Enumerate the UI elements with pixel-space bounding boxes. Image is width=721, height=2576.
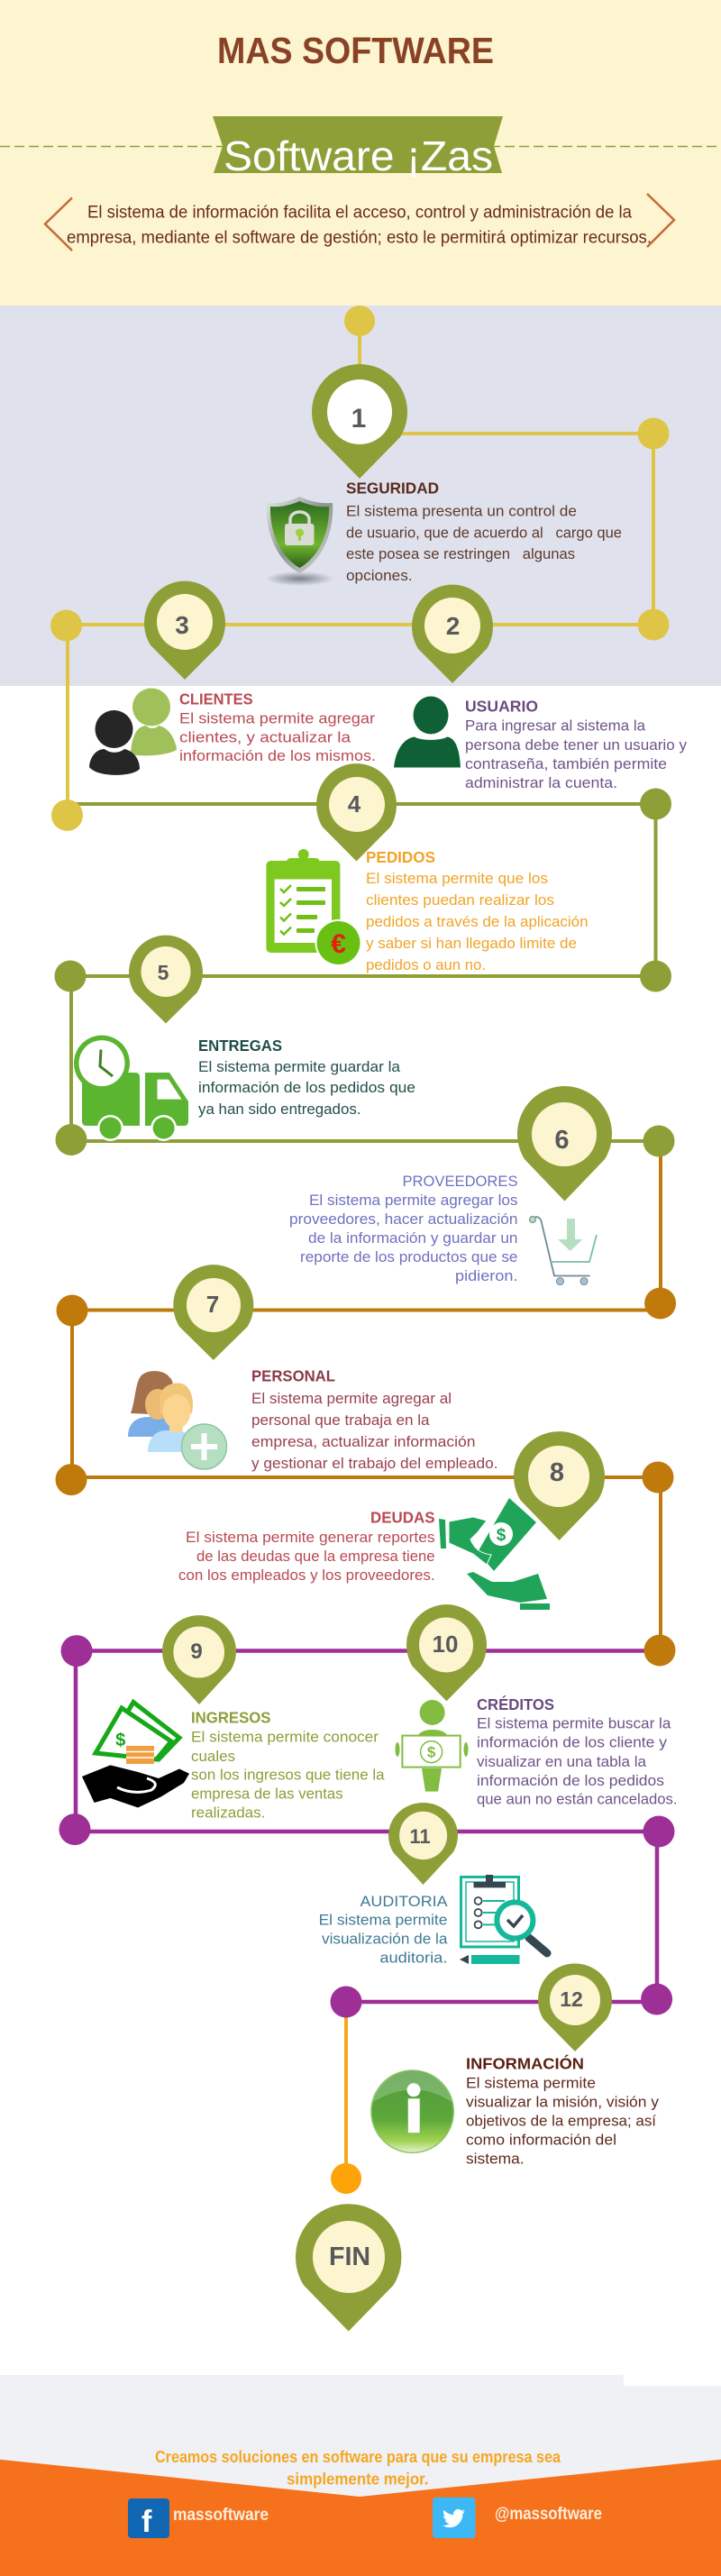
text: clientes: CLIENTES (179, 690, 253, 708)
pin 2 (412, 585, 493, 683)
connector: yellow (50, 306, 669, 831)
panel: step 9 ingresos (82, 1615, 385, 1822)
panel: footer (0, 2375, 721, 2576)
icon: money in hand: $ (115, 1731, 125, 1750)
panel: step 6 proveedores (289, 1086, 612, 1285)
pin 12 (538, 1964, 612, 2051)
pin 2: 2 (446, 612, 460, 640)
icon: people with plus (128, 1371, 227, 1469)
text: clientes (179, 690, 376, 764)
footer slogan: simplemente mejor. (287, 2470, 429, 2488)
pin: FIN: FIN (329, 2243, 370, 2271)
text: deudas: El sistema permite generar reportes (186, 1529, 435, 1546)
text: ingresos: son los ingresos que tiene la (191, 1767, 385, 1783)
pin 10: 10 (433, 1631, 458, 1658)
icon: money between hands: $ (497, 1526, 507, 1545)
title: MAS SOFTWARE (217, 30, 494, 71)
icon: shield with padlock (266, 497, 334, 586)
pin 1: 1 (351, 404, 366, 434)
text: informacion: como información del (466, 2132, 616, 2149)
text: proveedores: PROVEEDORES (402, 1173, 517, 1190)
text: ingresos: cuales (191, 1748, 235, 1765)
icon: person holding bill: $ (427, 1743, 436, 1761)
text: pedidos: y saber si han llegado limite de (366, 935, 577, 952)
text: usuario (465, 697, 687, 791)
pin 1 (312, 364, 407, 479)
pin 5 (129, 936, 203, 1024)
icon: info ball (371, 2070, 453, 2152)
pin 11 (388, 1803, 458, 1885)
pin: FIN (296, 2204, 401, 2331)
pin 4: 4 (348, 790, 361, 818)
icon: clipboard with euro: € (331, 929, 346, 959)
text: deudas: con los empleados y los proveedores. (178, 1567, 435, 1584)
text: usuario: Para ingresar al sistema la (465, 717, 646, 735)
footer gray background (0, 2375, 721, 2576)
text: entregas: información de los pedidos que (198, 1079, 415, 1096)
text: proveedores: reporte de los productos que se (300, 1248, 517, 1265)
text: pedidos: pedidos a través de la aplicación (366, 913, 589, 930)
panel: step 7 personal (128, 1265, 497, 1472)
text: ingresos: INGRESOS (191, 1709, 270, 1727)
connector: brown (56, 1141, 676, 1666)
pin 10 (406, 1604, 487, 1701)
intro text: El sistema de información facilita el acceso, control y administración de la (87, 204, 632, 222)
pin 6 (517, 1086, 612, 1201)
icon: facebook (128, 2498, 169, 2539)
text: entregas (198, 1037, 415, 1118)
text: clientes: clientes, y actualizar la (179, 728, 351, 745)
text: seguridad (346, 480, 622, 584)
text: proveedores: pidieron. (455, 1267, 517, 1284)
text: creditos (477, 1694, 678, 1807)
pin 12: 12 (560, 1987, 583, 2011)
text: proveedores: El sistema permite agregar los (309, 1192, 517, 1209)
text: seguridad: de usuario, que de acuerdo al cargo que (346, 524, 622, 541)
text: creditos: CRÉDITOS (477, 1694, 554, 1713)
footer slogan: Creamos soluciones en software para que su empresa sea (155, 2448, 561, 2466)
connector: purple (59, 1635, 674, 2017)
icon: facebook: f (141, 2505, 152, 2539)
text: seguridad: SEGURIDAD (346, 480, 439, 498)
text: entregas: ENTREGAS (198, 1037, 282, 1055)
twitter handle: @massoftware (495, 2505, 602, 2524)
footer orange band (0, 2460, 721, 2576)
panel: step 8 deudas (178, 1431, 605, 1610)
text: pedidos: clientes puedan realizar los (366, 891, 554, 909)
text: auditoria: El sistema permite (319, 1912, 447, 1929)
pin 8: 8 (550, 1458, 564, 1487)
icon: clipboard with euro (266, 849, 362, 966)
icon: left chevron (45, 198, 72, 251)
intro text: empresa, mediante el software de gestión; esto le permitirá optimizar recursos. (67, 229, 652, 247)
icon: shopping cart with arrow (530, 1217, 597, 1285)
text: pedidos: PEDIDOS (366, 848, 435, 866)
banner: Software ¡Zas: Software ¡Zas (224, 132, 493, 179)
text: clientes: información de los mismos. (179, 747, 376, 764)
text: personal: y gestionar el trabajo del empleado. (251, 1455, 497, 1472)
text: personal: personal que trabaja en la (251, 1411, 430, 1429)
panel: step 10 creditos (395, 1604, 678, 1807)
icon: money in hand (82, 1702, 189, 1808)
text: personal: El sistema permite agregar al (251, 1390, 452, 1407)
panel: step 4 pedidos (266, 763, 589, 973)
text: creditos: visualizar en una tabla la (477, 1753, 647, 1770)
icon: money between hands (439, 1498, 550, 1610)
icon: right chevron (647, 194, 674, 247)
text: pedidos: pedidos o aun no. (366, 956, 486, 973)
text: informacion (466, 2054, 660, 2168)
pin 5: 5 (158, 961, 169, 984)
icon: clipboard with magnifier (460, 1875, 547, 1964)
panel: step 11 auditoria (319, 1803, 547, 1967)
text: auditoria (319, 1893, 448, 1967)
text: usuario: contraseña, también permite (465, 755, 667, 772)
panel: step 1 seguridad (266, 364, 622, 586)
text: informacion: objetivos de la empresa; así (466, 2113, 656, 2130)
text: auditoria: visualización de la (322, 1931, 448, 1948)
panel: step 5 entregas (74, 936, 415, 1141)
pin 3: 3 (175, 611, 189, 639)
text: proveedores (289, 1173, 517, 1284)
text: creditos: información de los pedidos (477, 1772, 664, 1789)
icon: user silhouette (394, 696, 461, 768)
icon: two people (89, 689, 177, 775)
banner: Software ¡Zas (0, 116, 721, 179)
text: creditos: información de los cliente y (477, 1734, 668, 1751)
text: informacion: INFORMACIÓN (466, 2054, 584, 2073)
text: deudas (178, 1508, 435, 1584)
text: ingresos: El sistema permite conocer (191, 1729, 379, 1745)
text: personal (251, 1367, 497, 1472)
text: ingresos: empresa de las ventas (191, 1786, 343, 1803)
text: pedidos: El sistema permite que los (366, 870, 548, 887)
text: seguridad: El sistema presenta un control de (346, 503, 577, 519)
text: seguridad: opciones. (346, 567, 413, 584)
text: proveedores: de la información y guardar un (308, 1229, 517, 1247)
text: creditos: que aun no están cancelados. (477, 1790, 678, 1807)
text: creditos: El sistema permite buscar la (477, 1715, 671, 1732)
text: proveedores: proveedores, hacer actualización (289, 1210, 517, 1228)
text: auditoria: AUDITORIA (360, 1893, 448, 1910)
text: ingresos: realizadas. (191, 1804, 265, 1822)
text: pedidos (366, 848, 589, 973)
text: usuario: administrar la cuenta. (465, 774, 617, 791)
pin 9 (162, 1615, 236, 1704)
text: clientes: El sistema permite agregar (179, 709, 375, 726)
pin 8 (514, 1431, 605, 1540)
panel: step 3 clientes (89, 581, 376, 775)
icon: delivery truck with clock (74, 1036, 188, 1141)
text: ingresos (191, 1709, 385, 1822)
panel: header background (0, 0, 721, 306)
icon: twitter (433, 2498, 476, 2538)
text: seguridad: este posea se restringen algunas (346, 545, 575, 562)
text: personal: empresa, actualizar información (251, 1433, 476, 1450)
pin 7: 7 (206, 1291, 219, 1318)
text: informacion: sistema. (466, 2151, 525, 2168)
pin 4 (316, 763, 397, 862)
text: informacion: visualizar la misión, visión y (466, 2094, 660, 2111)
text: entregas: El sistema permite guardar la (198, 1058, 401, 1075)
text: usuario: persona debe tener un usuario y (465, 736, 687, 754)
panel: step 12 informacion (371, 1964, 660, 2168)
icon: person holding bill (395, 1700, 469, 1792)
facebook handle: massoftware (173, 2506, 269, 2525)
pin 11: 11 (409, 1825, 431, 1848)
pin 3 (144, 581, 225, 680)
text: usuario: USUARIO (465, 697, 538, 715)
text: entregas: ya han sido entregados. (198, 1101, 360, 1118)
pin 6: 6 (554, 1126, 570, 1155)
text: auditoria: auditoria. (379, 1950, 447, 1967)
pin 7 (173, 1265, 253, 1360)
text: deudas: de las deudas que la empresa tiene (196, 1548, 435, 1565)
panel: gray section background (0, 306, 721, 686)
text: personal: PERSONAL (251, 1367, 335, 1385)
panel: step 2 usuario (394, 585, 687, 791)
text: deudas: DEUDAS (370, 1508, 435, 1526)
connector: green (54, 788, 674, 1157)
pin 9: 9 (190, 1640, 203, 1664)
connector: orange (331, 2002, 361, 2194)
intro text (67, 204, 652, 247)
text: informacion: El sistema permite (466, 2075, 596, 2092)
footer slogan (155, 2448, 561, 2488)
